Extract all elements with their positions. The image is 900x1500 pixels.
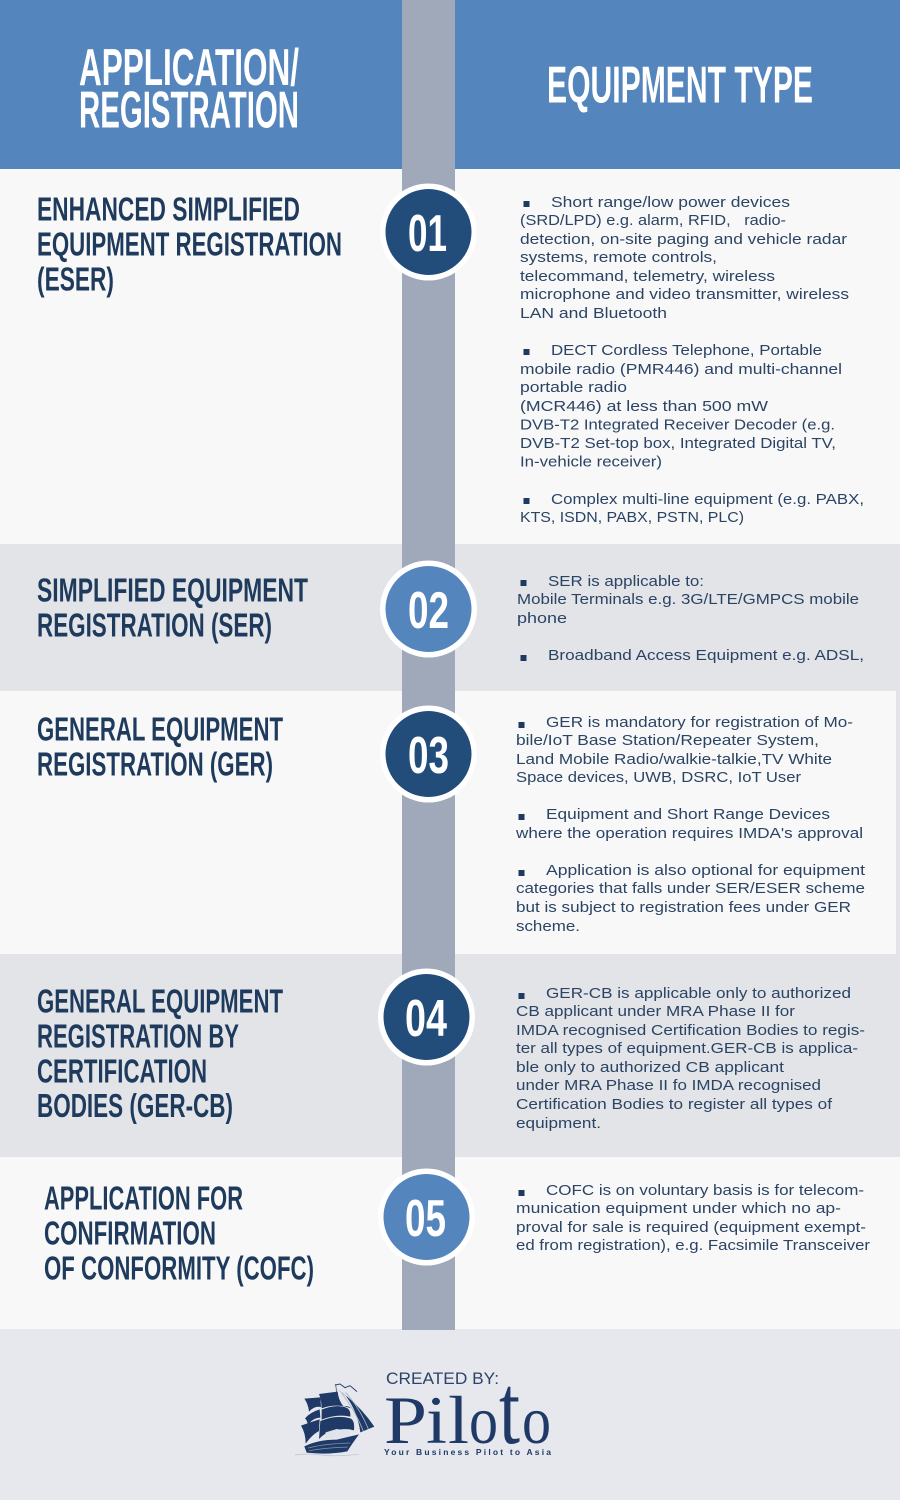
text block: GER-CB equipment types: GER-CB is applicable only to authorized [546,985,851,1002]
heading: enhanced simplified equipment registration [37,192,342,298]
heading: general equipment registration by certification bodies [37,984,283,1125]
text block: ESER equipment types: portable radio [520,379,627,396]
badge: 04: 04 [405,990,447,1048]
text: created by: CREATED BY: [386,1369,499,1388]
text block: ESER equipment types: DVB-T2 Integrated Receiver Decoder (e.g. [520,416,835,434]
text block: SER equipment types [517,573,864,664]
panel: GER row [0,691,896,954]
badge: 03: 03 [408,727,449,785]
text block: ESER equipment types: telecommand, telemetry, wireless [520,268,775,285]
text block: SER equipment types: Mobile Terminals e.g. 3G/LTE/GMPCS mobile [517,591,859,608]
text block: ESER equipment types [520,194,864,526]
heading: general equipment registration by certification bodies: REGISTRATION BY [37,1018,239,1056]
text block: GER equipment types: Space devices, UWB, DSRC, IoT User [516,769,801,786]
text: tagline: Your Business Pilot to Asia [384,1447,551,1457]
heading: enhanced simplified equipment registration: (ESER) [37,262,114,298]
icon: sailing ship [295,1384,374,1456]
text block: GER equipment types: Land Mobile Radio/walkie-talkie,TV White [516,751,832,768]
panel: ESER row [0,169,900,544]
text block: ESER equipment types: LAN and Bluetooth [520,305,667,322]
text block: SER equipment types: phone [517,610,567,627]
heading: application / registration: REGISTRATION [79,82,299,140]
text block: ESER equipment types: microphone and video transmitter, wireless [520,286,849,303]
panel: GER-CB row [0,954,900,1157]
text block: GER equipment types: bile/IoT Base Station/Repeater System, [516,732,819,749]
footer logo: created by Piloto [295,1354,551,1465]
text: Piloto wordmark: o [522,1382,551,1458]
timeline stripe [402,0,455,1330]
text block: ESER equipment types: In-vehicle receiver) [520,454,662,470]
text block: ESER equipment types: Complex multi-line equipment (e.g. PABX, [551,491,864,508]
text block: GER-CB equipment types: equipment. [516,1115,601,1132]
text block: ESER equipment types: systems, remote controls, [520,249,717,266]
text block: GER-CB equipment types: ble only to authorized CB applicant [516,1059,785,1076]
text block: COFC equipment types [516,1182,870,1254]
text: Piloto wordmark: o [469,1382,498,1458]
badge: 04 [378,968,475,1066]
heading: enhanced simplified equipment registration: EQUIPMENT REGISTRATION [37,226,342,264]
badge: 01: 01 [408,205,447,263]
text block: SER equipment types: SER is applicable to: [548,573,704,590]
heading: general equipment registration by certification bodies: GENERAL EQUIPMENT [37,984,283,1020]
panel: COFC row [0,1157,900,1329]
heading: simplified equipment registration [37,572,308,644]
heading: general equipment registration by certification bodies: BODIES (GER-CB) [37,1088,233,1125]
heading: application / registration: APPLICATION/ [79,39,299,97]
text: Piloto wordmark: t [499,1354,520,1465]
text block: GER equipment types: categories that falls under SER/ESER scheme [516,880,865,897]
text block: SER equipment types: Broadband Access Equipment e.g. ADSL, [548,647,864,664]
text block: COFC equipment types: COFC is on voluntary basis is for telecom- [546,1182,864,1199]
text block: ESER equipment types: (MCR446) at less than 500 mW [520,398,769,415]
text: Piloto wordmark [384,1354,551,1465]
heading: general equipment registration by certification bodies: CERTIFICATION [37,1054,207,1090]
text block: ESER equipment types: KTS, ISDN, PABX, PSTN, PLC) [520,509,744,526]
text block: ESER equipment types: DECT Cordless Telephone, Portable [551,342,822,359]
text block: GER-CB equipment types [516,985,865,1132]
text block: GER-CB equipment types: under MRA Phase II fo IMDA recognised [516,1077,821,1094]
heading: application for confirmation of conformity [44,1180,314,1288]
panel: SER row [0,544,900,691]
text block: ESER equipment types: mobile radio (PMR446) and multi-channel [520,361,842,378]
text block: GER equipment types: GER is mandatory for registration of Mo- [546,714,853,731]
text block: GER equipment types: scheme. [516,918,580,935]
heading: general equipment registration: REGISTRATION (GER) [37,746,273,784]
badge: 03 [380,706,477,802]
heading: application / registration [79,39,299,140]
heading: application for confirmation of conformity: CONFIRMATION [44,1216,216,1252]
badge: 05 [378,1168,475,1266]
badge: 02: 02 [408,582,449,640]
text block: GER equipment types: Application is also optional for equipment [546,862,866,879]
text block: COFC equipment types: ed from registration), e.g. Facsimile Transceiver [516,1237,870,1254]
text block: GER-CB equipment types: CB applicant under MRA Phase II for [516,1003,795,1020]
panel: header band [0,0,900,169]
heading: application for confirmation of conformity: APPLICATION FOR [44,1180,243,1218]
text: Piloto wordmark: l [448,1382,469,1458]
heading: general equipment registration [37,712,283,784]
text block: GER-CB equipment types: IMDA recognised Certification Bodies to regis- [516,1022,865,1039]
text block: COFC equipment types: munication equipment under which no ap- [516,1200,841,1217]
text block: GER equipment types: where the operation requires IMDA's approval [515,825,863,842]
text block: GER-CB equipment types: Certification Bodies to register all types of [516,1096,833,1113]
footer band [0,1329,900,1500]
heading: application for confirmation of conformity: OF CONFORMITY (COFC) [44,1250,314,1288]
text block: ESER equipment types: DVB-T2 Set-top box, Integrated Digital TV, [520,435,836,452]
badge: 02 [380,560,477,658]
text block: GER equipment types [515,714,866,935]
heading: general equipment registration: GENERAL EQUIPMENT [37,712,283,748]
text block: ESER equipment types: detection, on-site paging and vehicle radar [520,231,847,248]
heading: simplified equipment registration: REGISTRATION (SER) [37,608,272,644]
text: Piloto wordmark: i [426,1382,447,1458]
heading: simplified equipment registration: SIMPLIFIED EQUIPMENT [37,572,308,610]
badge: 01 [380,184,477,280]
badge: 05: 05 [405,1190,446,1248]
text block: COFC equipment types: proval for sale is required (equipment exempt- [516,1219,866,1236]
text block: GER equipment types: Equipment and Short Range Devices [546,806,830,823]
text block: GER-CB equipment types: ter all types of equipment.GER-CB is applica- [516,1040,858,1057]
text block: ESER equipment types: Short range/low power devices [551,194,790,211]
text block: GER equipment types: but is subject to registration fees under GER [516,899,851,916]
text block: ESER equipment types: (SRD/LPD) e.g. alarm, RFID, radio- [520,212,786,229]
text: Piloto wordmark: P [384,1382,427,1458]
heading: enhanced simplified equipment registration: ENHANCED SIMPLIFIED [37,192,300,228]
